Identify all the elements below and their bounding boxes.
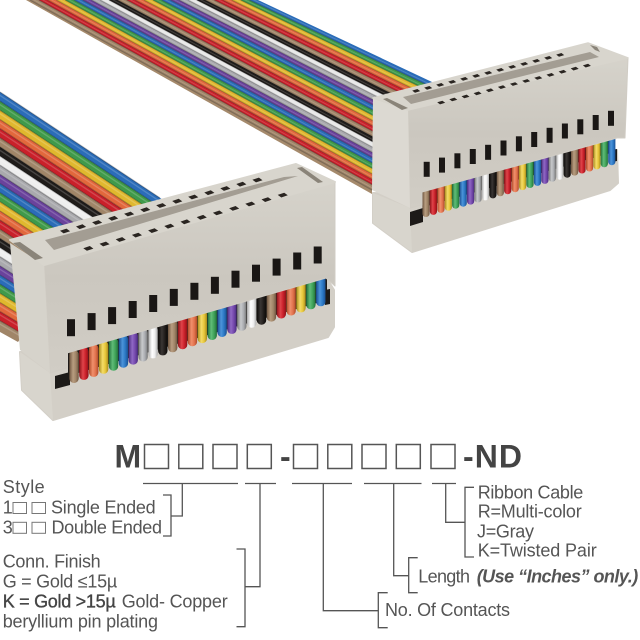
text block: ribbon cable: [477, 482, 597, 561]
text block: connector finish: Gold- Copper: [122, 591, 228, 611]
text block: style: [3, 477, 162, 537]
front connector front slots: [67, 246, 322, 336]
front ribbon cable: [0, 92, 162, 342]
front connector top face: [10, 164, 335, 265]
back connector wire ends: [422, 135, 615, 217]
part number heading: -ND: [463, 438, 522, 474]
text block: connector finish: K = Gold >15µ: [3, 591, 116, 611]
front connector: [10, 164, 335, 420]
back connector shell front face: [408, 58, 628, 208]
text block: style: Style: [3, 477, 45, 497]
part number heading: -: [280, 438, 291, 474]
back connector lower end face: [373, 193, 412, 252]
back connector left end face: [372, 98, 410, 208]
text block: ribbon cable: J=Gray: [477, 521, 534, 541]
text block: style: 3: [3, 517, 13, 537]
front connector dark slots: [55, 276, 330, 389]
front connector shell front face: [44, 182, 335, 373]
front connector end notches: [13, 167, 323, 260]
back connector: [372, 43, 628, 252]
text block: style: Double Ended: [52, 517, 162, 537]
text block: ribbon cable: R=Multi-color: [478, 502, 582, 522]
text block: length: (Use “Inches” only.): [477, 566, 638, 586]
text block: connector finish: beryllium pin plating: [3, 611, 158, 631]
back connector end notches: [383, 45, 600, 110]
text block: number of contacts: No. Of Contacts: [385, 600, 510, 620]
front connector wire ends: [69, 273, 326, 383]
part number heading: M: [114, 438, 141, 474]
back connector top face: [373, 43, 628, 110]
front connector top holes: [60, 178, 288, 251]
text block: connector finish: Conn. Finish: [3, 551, 101, 571]
back connector dark slots: [410, 136, 617, 226]
front connector top recess: [45, 176, 298, 250]
text block: ribbon cable: K=Twisted Pair: [478, 541, 597, 561]
part number heading: [114, 438, 522, 474]
front connector lower body: [20, 277, 334, 420]
connector lines between code and descriptions: [143, 484, 474, 628]
back connector lower body: [373, 150, 618, 252]
back ribbon cable: [26, 0, 432, 194]
text block: style: Single Ended: [51, 498, 156, 518]
front connector lower end face: [20, 352, 53, 420]
text block: style: 1: [3, 498, 13, 518]
front connector left end face: [10, 243, 50, 373]
text block: connector finish: [3, 551, 228, 631]
back connector top holes: [412, 53, 591, 104]
back connector front slots: [424, 111, 614, 177]
back connector top recess: [403, 52, 599, 104]
text block: length: Length: [418, 566, 470, 586]
text block: ribbon cable: Ribbon Cable: [478, 482, 583, 502]
text block: connector finish: G = Gold ≤15µ: [3, 572, 117, 592]
